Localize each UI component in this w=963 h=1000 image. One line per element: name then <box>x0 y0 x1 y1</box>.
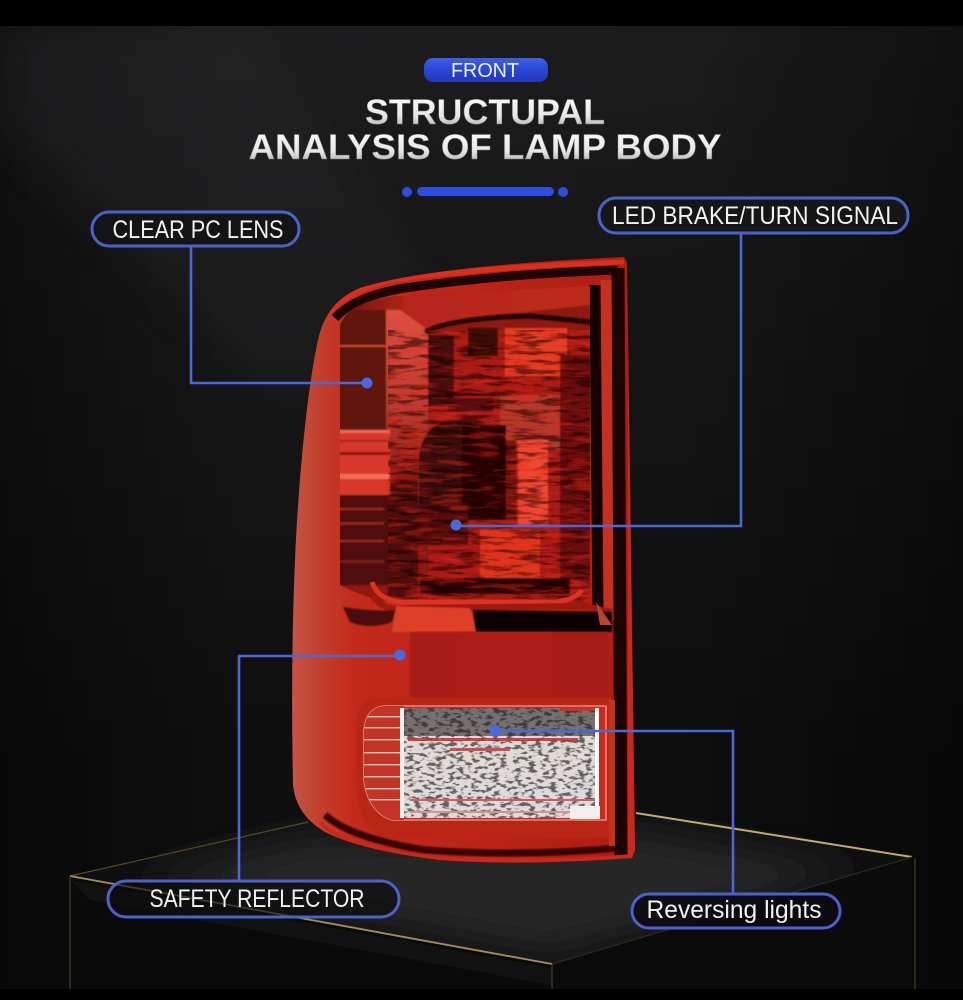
lower dark blobs <box>343 607 396 626</box>
tail lamp <box>292 257 636 868</box>
title: STRUCTUPAL <box>365 93 605 132</box>
upper lens <box>340 286 590 603</box>
reversing light lens <box>364 706 600 820</box>
lens lower rim <box>372 582 582 602</box>
black bottom bar <box>0 989 963 1000</box>
title <box>248 93 722 167</box>
lamp detail <box>320 258 636 868</box>
black top bar <box>0 0 963 26</box>
front badge: FRONT <box>451 60 519 82</box>
label: safety reflector: SAFETY REFLECTOR <box>150 885 364 913</box>
label: reversing lights: Reversing lights <box>646 896 822 924</box>
pedestal <box>70 813 915 990</box>
callout dots <box>362 378 500 736</box>
bottom dark band <box>325 815 618 853</box>
label: led brake/turn signal: LED BRAKE/TURN SIGNAL <box>612 202 898 230</box>
title: ANALYSIS OF LAMP BODY <box>248 128 722 167</box>
label: clear pc lens: CLEAR PC LENS <box>112 216 284 244</box>
label: safety reflector <box>108 881 399 917</box>
lamp body <box>292 257 635 863</box>
title divider <box>402 187 568 197</box>
callout lines <box>191 233 741 893</box>
reverse lens surround <box>356 698 612 838</box>
front badge <box>424 58 548 82</box>
safety reflector panel <box>410 632 608 698</box>
